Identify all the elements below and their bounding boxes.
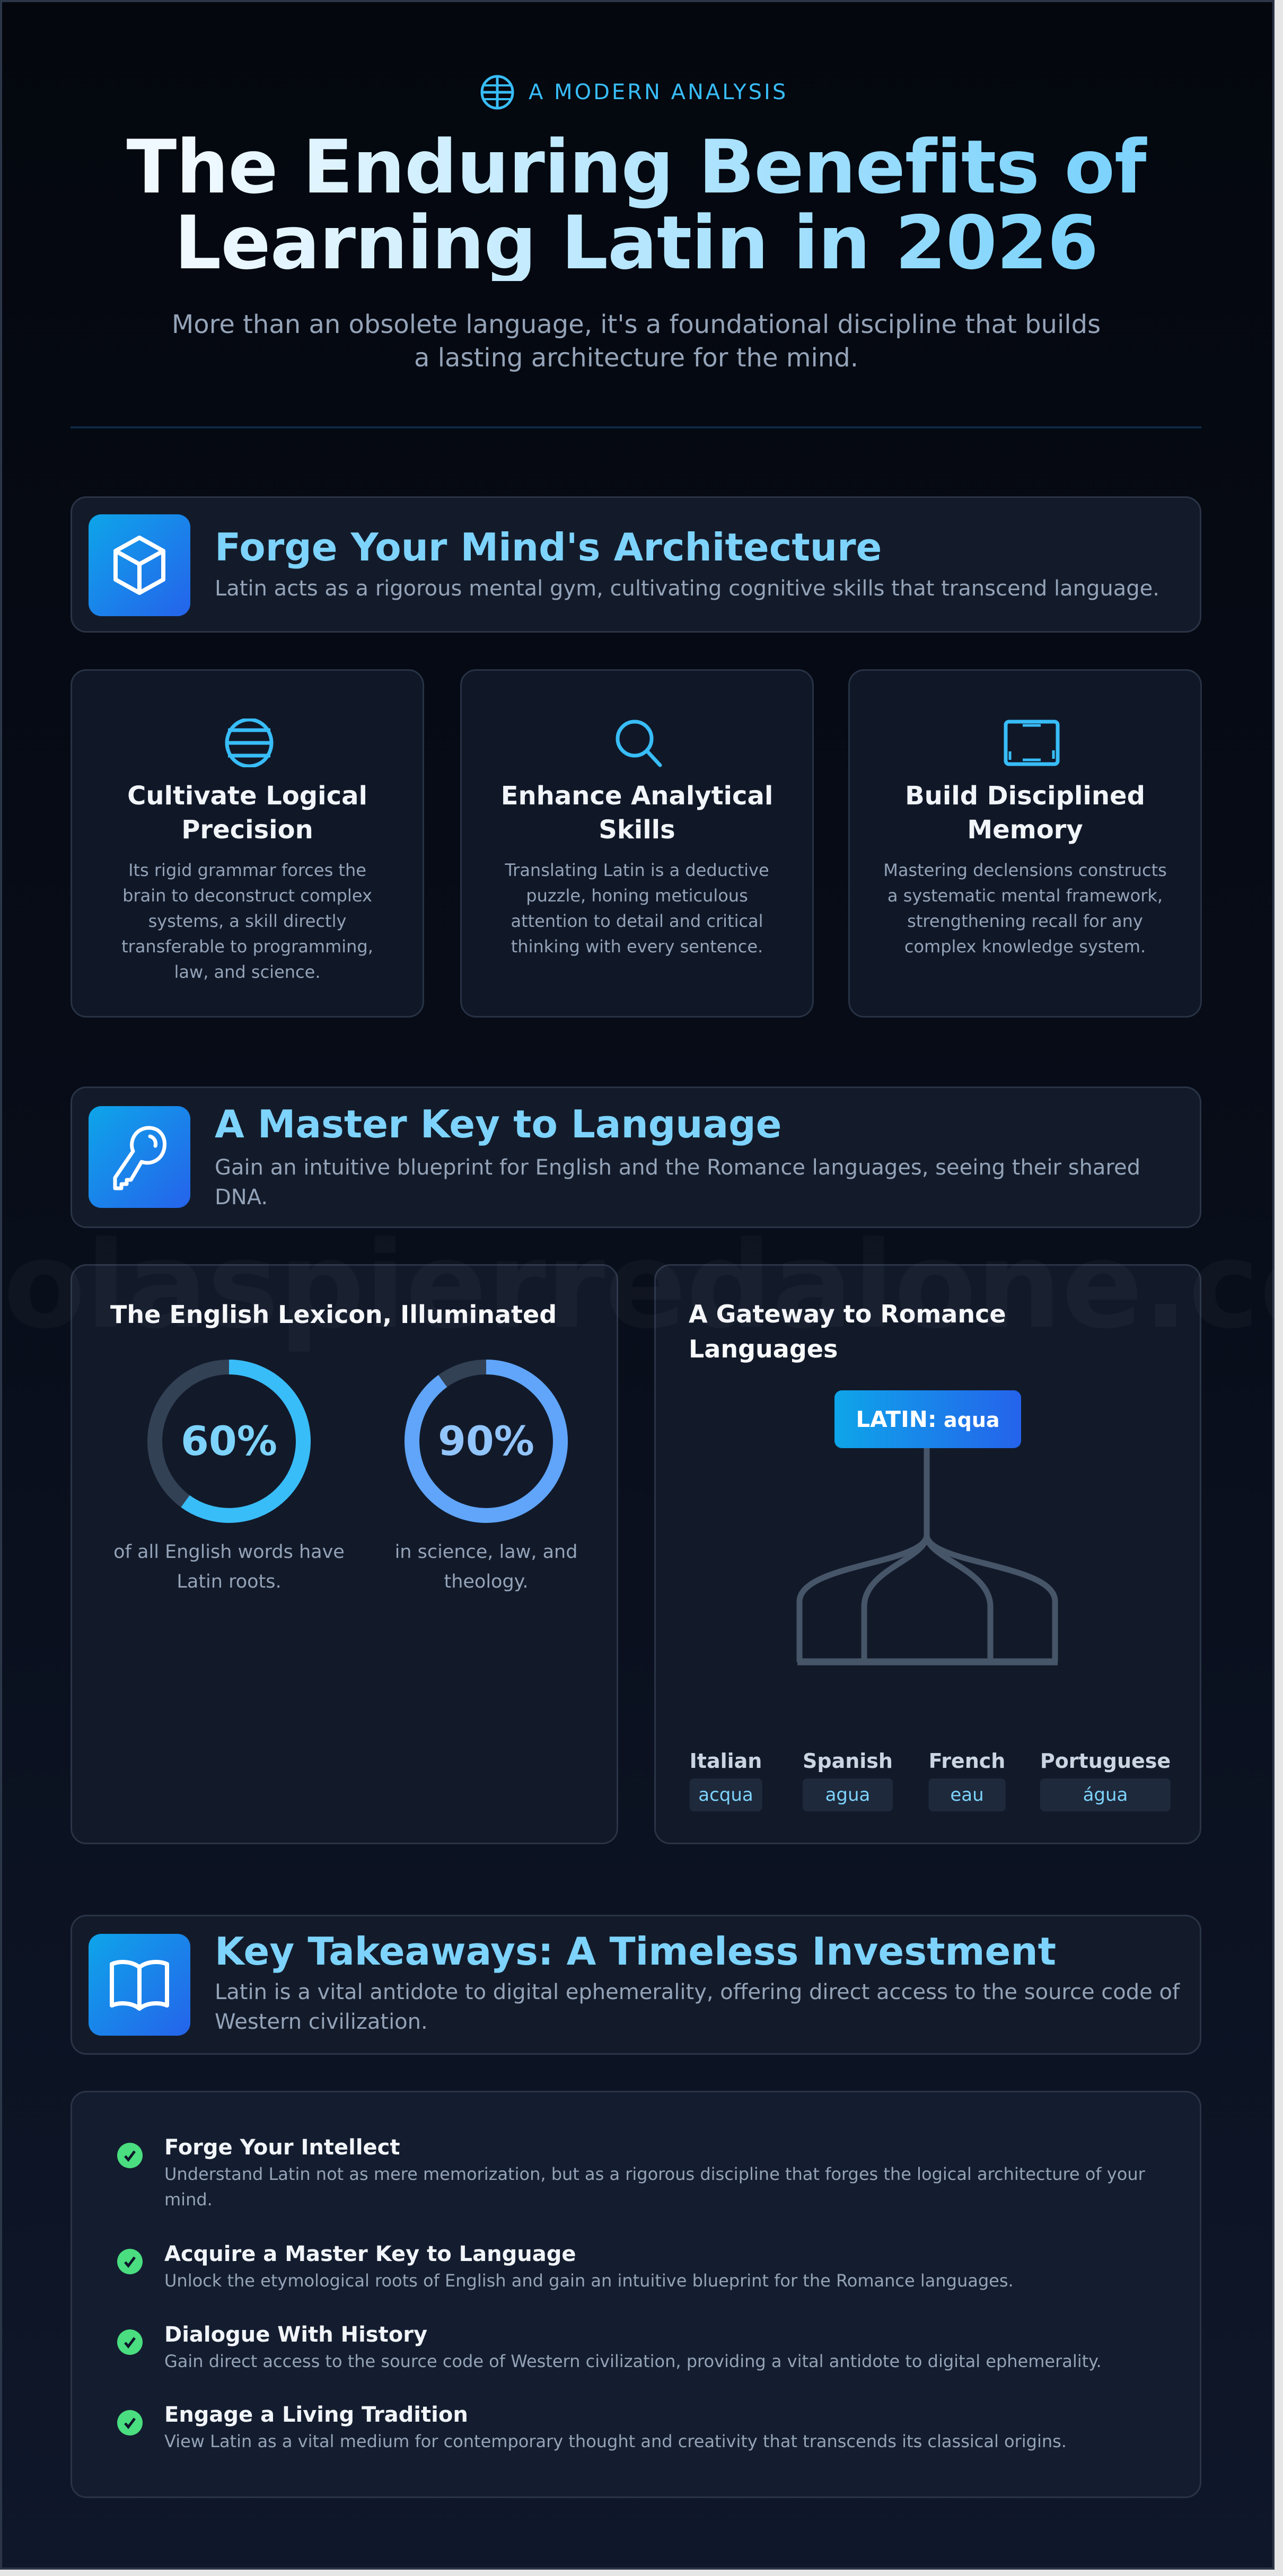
badge: A MODERN ANALYSIS: [529, 80, 788, 104]
language: Italian: Italian: [690, 1749, 762, 1773]
language: French: French: [929, 1749, 1005, 1773]
card: logical precision: Cultivate Logical Precision: [127, 781, 367, 845]
card: logical precision: [71, 669, 424, 1018]
card: logical precision: Its rigid grammar forces the brain to deconstruct complex systems, a skill directly transferable to programming, law, and science.: [121, 860, 373, 982]
takeaway 1: Forge Your Intellect: [164, 2135, 400, 2160]
panel: Romance gateway: [654, 1264, 1201, 1844]
panel: takeaways list: [71, 2091, 1201, 2498]
icon: magnifier: [616, 720, 662, 767]
card: analytical skills: [460, 669, 814, 1018]
subheading: Gain an intuitive blueprint for English and the Romance languages, seeing their shared DNA.: [215, 1155, 1140, 1210]
heading: A Gateway to Romance Languages: [689, 1300, 1006, 1363]
panel: English lexicon: [71, 1264, 618, 1844]
title: The Enduring Benefits of: [127, 124, 1146, 210]
language: Spanish: Spanish: [803, 1749, 893, 1773]
icon: scroll frame: [1004, 720, 1059, 766]
takeaway 2: Unlock the etymological roots of English and gain an intuitive blueprint for the Romance languages.: [164, 2271, 1014, 2291]
section header: A Master Key to Language: [71, 1087, 1201, 1228]
section header: Key Takeaways: [71, 1915, 1201, 2055]
heading: Key Takeaways: A Timeless Investment: [215, 1929, 1056, 1974]
latin root box: [834, 1390, 1021, 1448]
takeaway 2: [164, 2242, 1014, 2291]
card: disciplined memory: Build Disciplined Memory: [905, 781, 1145, 845]
card: analytical skills: Translating Latin is a deductive puzzle, honing meticulous attention to detail and critical thinking with every sentence.: [505, 860, 769, 957]
language: Portuguese: [1040, 1749, 1171, 1811]
language: Spanish: agua: [825, 1784, 870, 1806]
takeaway 1: [164, 2135, 1145, 2210]
tree diagram: [796, 1448, 1058, 1665]
language: Italian: [689, 1749, 762, 1811]
heading: The English Lexicon, Illuminated: [110, 1300, 557, 1329]
icon: cube: [89, 514, 190, 616]
language: French: [929, 1749, 1005, 1811]
donut: 90%: 90%: [438, 1417, 534, 1465]
takeaway 3: [164, 2323, 1102, 2371]
takeaway 4: [164, 2403, 1067, 2451]
language: Italian: acqua: [698, 1784, 753, 1806]
subtitle: More than an obsolete language, it's a foundational discipline that builds a lasting architecture for the mind.: [172, 310, 1101, 373]
card: disciplined memory: [848, 669, 1202, 1018]
heading: A Master Key to Language: [215, 1102, 781, 1146]
takeaway 2: Acquire a Master Key to Language: [164, 2242, 576, 2266]
card: analytical skills: Enhance Analytical Skills: [501, 781, 773, 845]
check 4: [117, 2410, 143, 2435]
icon: globe: [480, 75, 514, 109]
badge: [480, 75, 788, 109]
icon: key: [89, 1106, 190, 1208]
takeaway 3: Dialogue With History: [164, 2323, 427, 2347]
heading: Forge Your Mind's Architecture: [215, 525, 882, 569]
subheading: Latin is a vital antidote to digital ephemerality, offering direct access to the source code of Western civilization.: [215, 1980, 1180, 2034]
icon: book: [89, 1934, 190, 2036]
caption: 60%: of all English words have Latin roots.: [113, 1541, 345, 1592]
takeaway 1: Understand Latin not as mere memorization, but as a rigorous discipline that forges the logical architecture of your mind.: [164, 2164, 1145, 2210]
icon: grid globe: [225, 719, 274, 767]
language: French: eau: [950, 1784, 984, 1806]
section header: Forge Your Mind's Architecture: [71, 496, 1201, 633]
language: Portuguese: Portuguese: [1040, 1749, 1171, 1773]
latin root box: LATIN: aqua: [856, 1406, 1000, 1432]
donut: 90%: [405, 1360, 568, 1523]
check 2: [117, 2249, 143, 2274]
takeaway 4: Engage a Living Tradition: [164, 2403, 468, 2427]
language: Spanish: [803, 1749, 893, 1811]
takeaway 4: View Latin as a vital medium for contemporary thought and creativity that transcends its classical origins.: [164, 2431, 1067, 2451]
caption: 90%: in science, law, and theology.: [395, 1541, 577, 1592]
takeaway 3: Gain direct access to the source code of Western civilization, providing a vital antidote to digital ephemerality.: [164, 2351, 1102, 2371]
title: [0, 129, 1272, 281]
language: Portuguese: água: [1083, 1784, 1128, 1806]
card: disciplined memory: Mastering declensions constructs a systematic mental framework, strengthening recall for any complex knowledge system.: [883, 860, 1167, 957]
check 1: [117, 2143, 143, 2168]
check 3: [117, 2329, 143, 2355]
subheading: Latin acts as a rigorous mental gym, cultivating cognitive skills that transcend language.: [215, 576, 1159, 601]
donut: 60%: [147, 1360, 311, 1523]
title: Learning Latin in 2026: [174, 200, 1098, 286]
donut: 60%: 60%: [181, 1417, 277, 1465]
